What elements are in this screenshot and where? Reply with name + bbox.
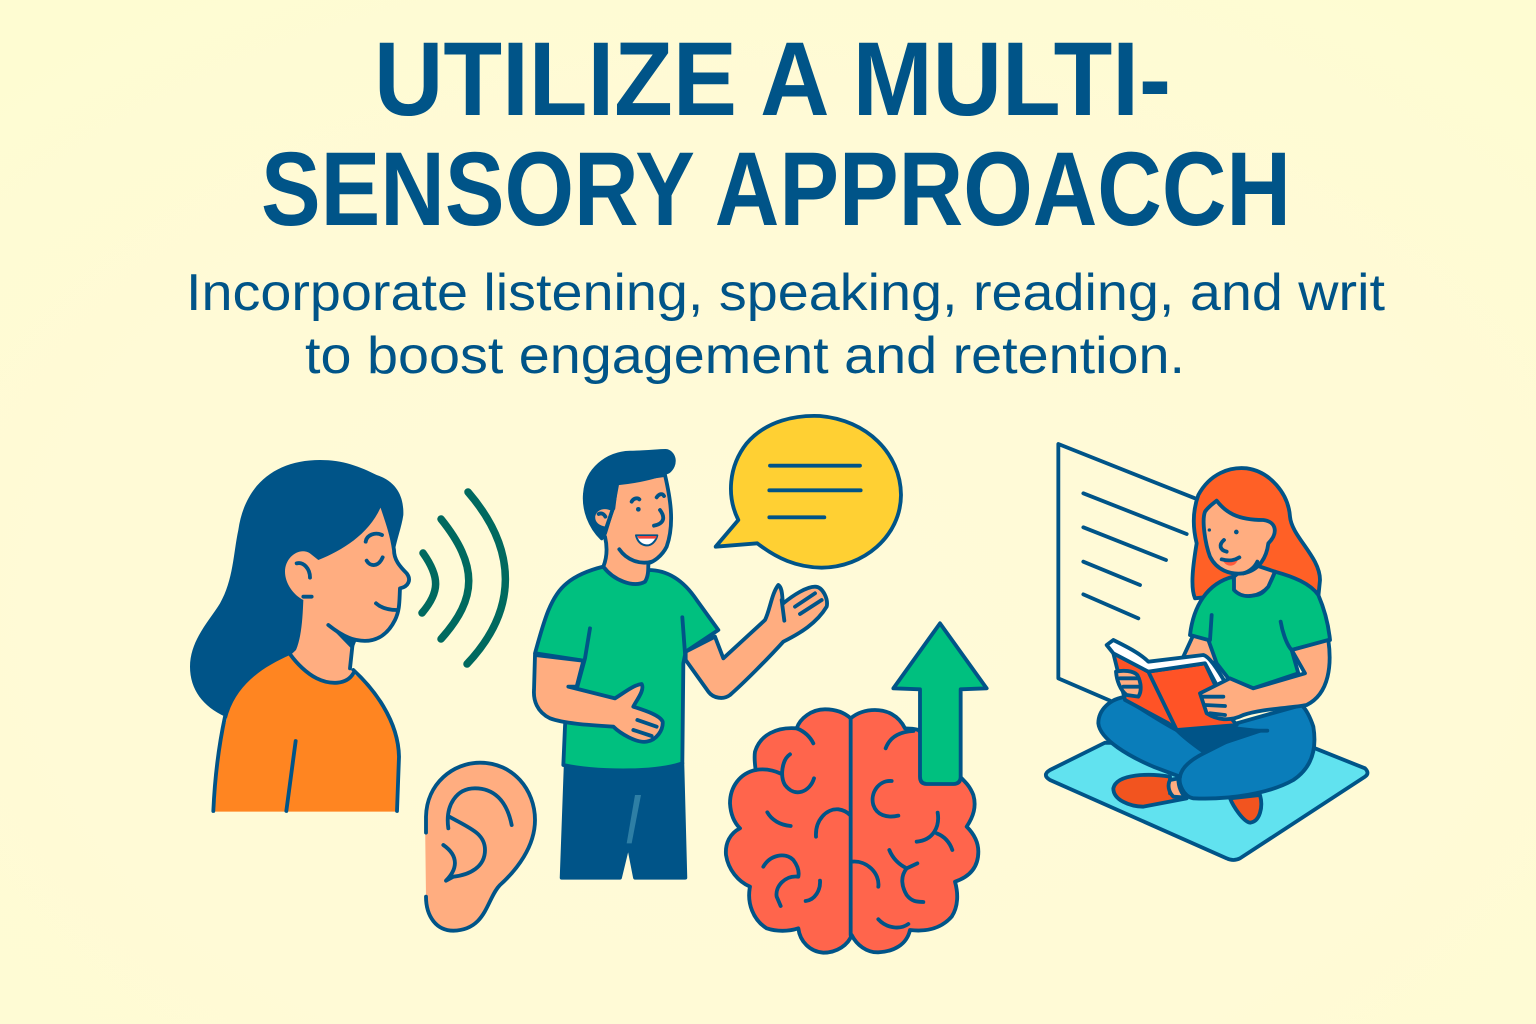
title: SENSORY APPROACCH: [261, 131, 1291, 248]
icon: sound waves: [422, 492, 505, 664]
left arm and hand: [534, 655, 663, 742]
hands: [1116, 640, 1330, 719]
floor mat: [1046, 743, 1367, 860]
orange shirt: [213, 655, 399, 812]
icon: green up arrow: [893, 623, 987, 784]
icon: ear: [425, 763, 535, 931]
title: UTILIZE A MULTI-: [374, 21, 1171, 138]
pants: [562, 763, 685, 878]
face and neck: [285, 505, 409, 682]
speech bubble: [716, 416, 901, 568]
illustration: man speaking: [534, 451, 827, 878]
illustration: woman reading: [1046, 444, 1367, 860]
man's ear: [593, 507, 613, 529]
icon: brain: [726, 709, 978, 953]
subtitle text: [186, 264, 1386, 385]
hair: [1192, 468, 1320, 600]
green shirt: [1190, 572, 1330, 688]
subtitle text: to boost engagement and retention.: [305, 327, 1185, 385]
legs: [1098, 697, 1314, 799]
title: [261, 21, 1291, 248]
neck and face: [1204, 501, 1292, 650]
right arm and raised hand: [686, 585, 827, 698]
feet: [1113, 775, 1261, 823]
hair: [190, 460, 403, 723]
open book: [1107, 640, 1237, 730]
green shirt: [535, 567, 718, 770]
subtitle text: Incorporate listening, speaking, reading, and writ: [186, 264, 1386, 322]
bubble text lines: [769, 466, 861, 517]
shirt creases: [577, 617, 685, 687]
illustration: woman listening: [190, 460, 409, 812]
head: [585, 451, 674, 584]
paper sheet: [1058, 444, 1195, 701]
brain folds: [756, 718, 952, 935]
left arm: [1183, 635, 1217, 663]
